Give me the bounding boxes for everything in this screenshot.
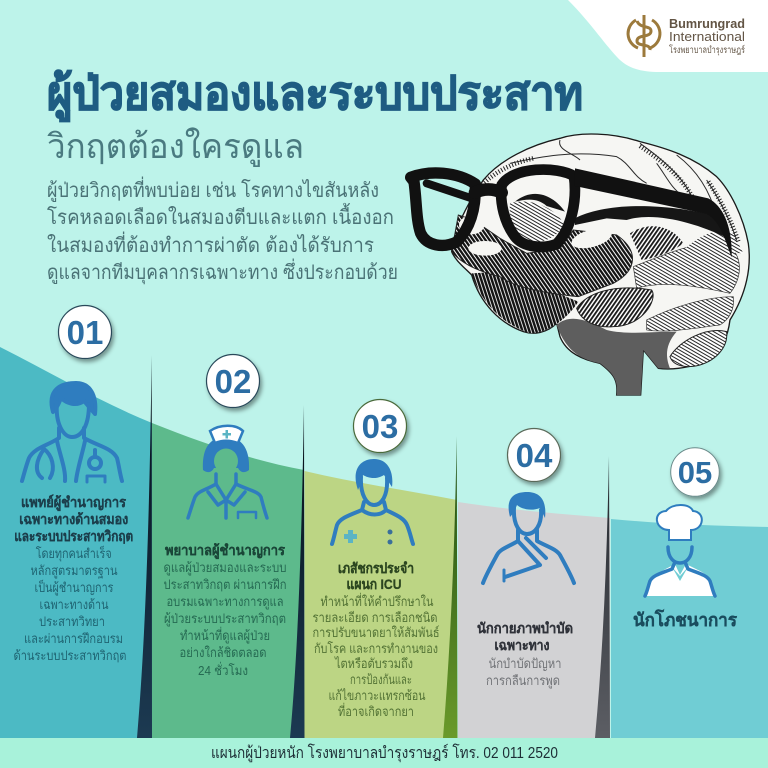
icon: chef	[645, 505, 715, 596]
body text	[164, 560, 286, 678]
body text	[486, 656, 562, 689]
body text: อย่างใกล้ชิดตลอด	[180, 645, 266, 660]
intro text	[47, 176, 398, 285]
icon: pharmacist	[332, 459, 413, 544]
logo panel	[568, 0, 768, 72]
body text: การกลืนการพูด	[486, 673, 560, 689]
title: ผู้ป่วยสมองและระบบประสาท	[47, 67, 583, 122]
intro text: ดูแลจากทีมบุคลากรเฉพาะทาง ซึ่งประกอบด้วย	[47, 258, 398, 285]
lower dark lobe	[472, 272, 578, 333]
dark upper band	[575, 206, 728, 238]
illustration: brain with glasses	[411, 134, 749, 395]
heading: และระบบประสาทวิกฤต	[14, 528, 133, 544]
intro text: โรคหลอดเลือดในสมองตีบและแตก เนื้องอก	[47, 203, 394, 229]
logo text: โรงพยาบาลบำรุงราษฎร์	[669, 44, 745, 56]
glasses	[411, 170, 575, 247]
brain outline	[452, 134, 749, 395]
brain stem	[557, 319, 677, 395]
number badge 05: 05	[678, 455, 712, 490]
lower middle lobe	[577, 288, 653, 327]
body text	[14, 544, 126, 663]
number badge 05	[671, 448, 719, 496]
body text: แก้ไขภาวะแทรกซ้อน	[328, 688, 426, 703]
body text: ไตหรือตับรวมถึง	[334, 656, 413, 671]
lens lobe	[510, 202, 563, 243]
body text: รายละเอียด การเลือกชนิด	[312, 610, 438, 625]
heading	[338, 560, 414, 592]
logo text: Bumrungrad	[669, 16, 745, 31]
body text: นักบำบัดปัญหา	[488, 656, 562, 671]
heading: นักโภชนาการ	[633, 609, 737, 630]
body text: ด้านระบบประสาทวิกฤต	[14, 648, 126, 663]
panel 4: physical therapist	[458, 428, 610, 738]
body text: ประสาทวิกฤต ผ่านการฝึก	[164, 577, 286, 592]
heading	[14, 494, 133, 544]
heading: เภสัชกรประจำ	[338, 560, 414, 576]
number badge 04: 04	[516, 437, 553, 474]
spike	[137, 355, 152, 738]
spike	[290, 405, 304, 738]
heading: แผนก ICU	[346, 576, 402, 592]
gyri comb shading	[480, 146, 738, 242]
number badge 01: 01	[67, 314, 103, 351]
body text: กับโรค และการทำงานของ	[314, 641, 438, 656]
body text: การป้องกันและ	[350, 672, 412, 687]
logo text: International	[669, 29, 745, 44]
body text: ทำหน้าที่ดูแลผู้ป่วย	[180, 627, 270, 644]
glasses temple arm	[575, 168, 732, 257]
panel 1: doctor	[0, 306, 152, 738]
spike	[595, 456, 610, 738]
body text: ประสาทวิทยา	[39, 614, 105, 629]
cerebellum	[670, 331, 727, 367]
front dark lobe	[452, 215, 632, 297]
gyri lines	[510, 140, 737, 240]
heading: เฉพาะทางด้านสมอง	[19, 511, 128, 527]
body text: และผ่านการฝึกอบรม	[24, 631, 123, 646]
body text: การปรับขนาดยาให้สัมพันธ์	[312, 625, 440, 640]
icon: therapist	[483, 492, 574, 583]
number badge 02	[206, 354, 260, 408]
body text: ผู้ป่วยระบบประสาทวิกฤต	[164, 611, 286, 627]
logo text	[669, 16, 745, 56]
spike	[443, 436, 458, 738]
number badge 04	[508, 428, 560, 482]
heading: นักกายภาพบำบัด	[477, 620, 573, 636]
heading: พยาบาลผู้ชำนาญการ	[165, 542, 285, 559]
body text: โดยทุกคนสำเร็จ	[36, 544, 112, 562]
panel 5: nutritionist	[611, 448, 768, 738]
body text: ดูแลผู้ป่วยสมองและระบบ	[164, 560, 286, 576]
number badge 02: 02	[215, 363, 251, 400]
body text: ทำหน้าที่ให้คำปรึกษาใน	[320, 593, 434, 609]
body text: เป็นผู้ชำนาญการ	[34, 578, 114, 596]
icon: doctor	[22, 383, 122, 482]
icon: caduceus logo	[628, 15, 660, 57]
heading	[477, 620, 573, 653]
panel 2: nurse	[152, 354, 304, 738]
body text: หลักสูตรมาตรฐาน	[30, 563, 118, 579]
body text: อบรมเฉพาะทางการดูแล	[166, 594, 284, 610]
footer bar: แผนกผู้ป่วยหนัก โรงพยาบาลบำรุงราษฎร์ โทร. 02 011 2520	[211, 743, 558, 763]
subtitle: วิกฤตต้องใครดูแล	[47, 127, 304, 167]
number badge 03: 03	[362, 408, 398, 445]
right hatched lobes	[633, 243, 739, 293]
body text: ที่อาจเกิดจากยา	[338, 703, 414, 719]
intro text: ในสมองที่ต้องทำการผ่าตัด ต้องได้รับการ	[47, 231, 374, 257]
intro text: ผู้ป่วยวิกฤตที่พบบ่อย เช่น โรคทางไขสันหลัง	[47, 176, 379, 203]
white lobe highlights	[459, 216, 614, 256]
heading: แพทย์ผู้ชำนาญการ	[21, 494, 126, 511]
panel 3: pharmacist	[304, 400, 458, 738]
body text: เฉพาะทางด้าน	[40, 597, 109, 612]
footer bar	[0, 738, 768, 768]
number badge 03	[354, 400, 406, 452]
body text: 24 ชั่วโมง	[198, 662, 248, 678]
icon: nurse	[188, 426, 267, 518]
body text	[312, 593, 440, 719]
number badge 01	[58, 306, 112, 358]
heading: เฉพาะทาง	[494, 637, 550, 653]
